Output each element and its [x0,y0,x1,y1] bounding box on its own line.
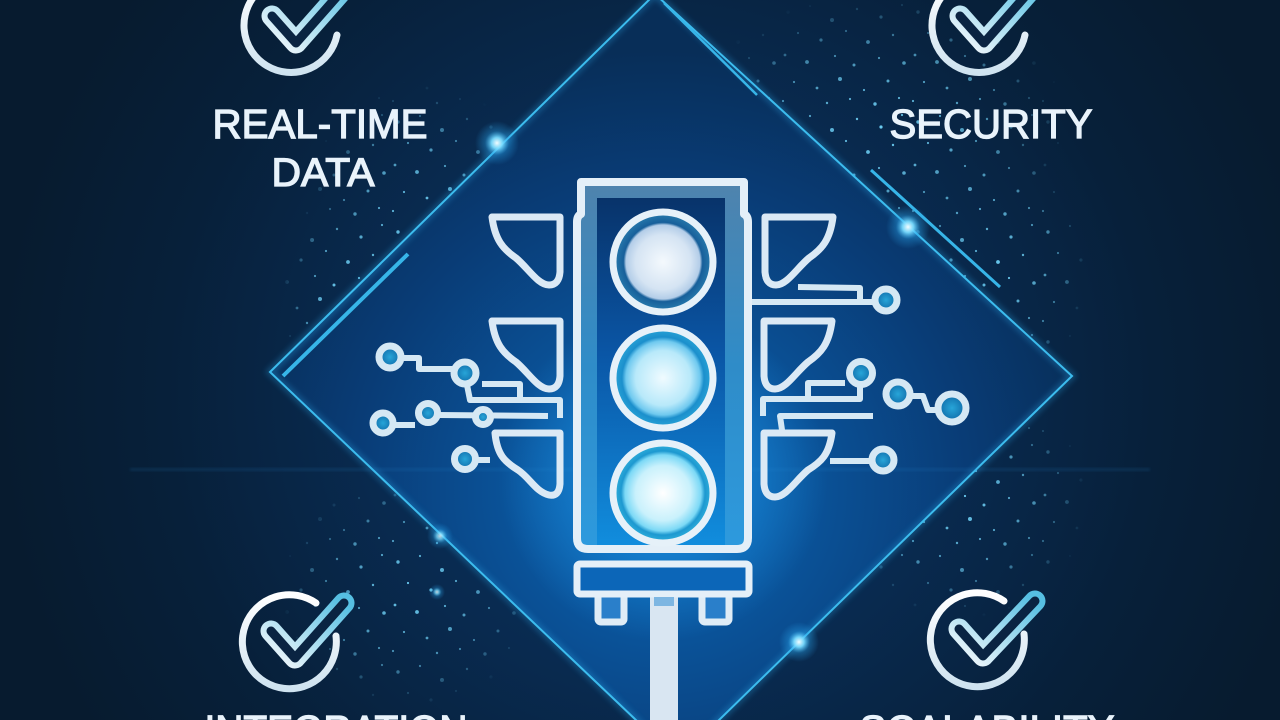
base bracket [577,564,749,594]
feature: real-time data [212,0,428,195]
lamp: top [613,212,713,312]
central glow [498,310,828,640]
horizontal light flare [130,468,1150,471]
pole [650,597,678,720]
icon: check circle [932,0,1036,72]
left circuit traces [373,346,560,470]
mounting feet [598,594,729,622]
diamond frame [270,0,1072,720]
inner panel [597,198,725,545]
label: SECURITY [890,101,1092,147]
icon: check circle [242,595,344,689]
traffic light [577,182,749,720]
housing [577,182,748,549]
feature: scalability [860,593,1114,720]
speckled particle field [285,4,1082,702]
icon: check circle [930,593,1035,687]
signal visors [492,217,833,497]
lamp: middle [613,328,713,428]
right circuit traces [752,287,966,471]
label: REAL-TIME [212,101,428,147]
light sparks [427,121,930,662]
label line two: DATA [272,151,375,195]
feature: security [890,0,1092,147]
icon: check circle [244,0,348,72]
lamp: bottom [613,443,713,543]
feature: integration [204,595,468,720]
